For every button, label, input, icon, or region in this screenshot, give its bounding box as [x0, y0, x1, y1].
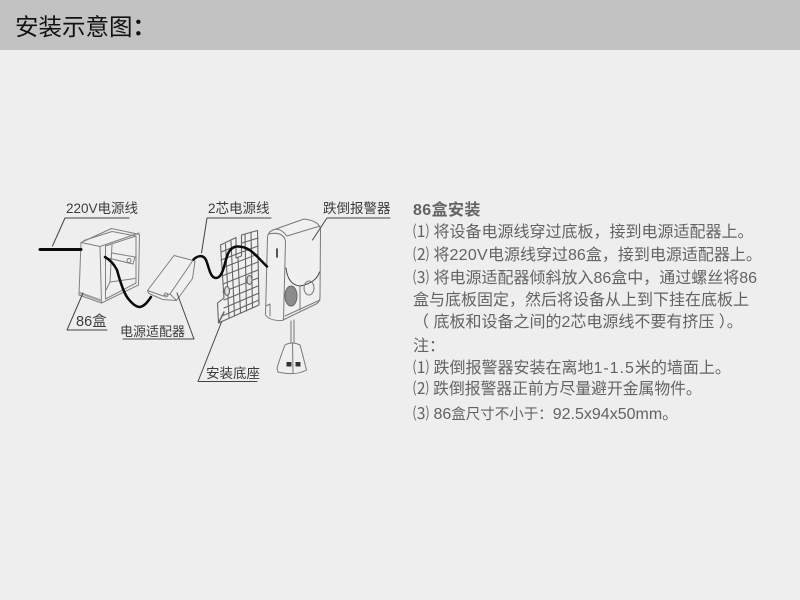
- step 3: ⑶ 将电源适配器倾斜放入86盒中，通过螺丝将86: [413, 270, 757, 287]
- step 3 end: （ 底板和设备之间的2芯电源线不要有挤压 ）。: [413, 314, 743, 331]
- pendant button: [277, 320, 306, 374]
- label: adapter: 电源适配器: [120, 324, 185, 339]
- label: 220V power line: 220V电源线: [66, 201, 138, 216]
- label: fall alarm: [312, 201, 391, 240]
- title bar: [0, 0, 800, 50]
- wall plate: [218, 230, 259, 323]
- instructions text block: [413, 201, 762, 423]
- label: mounting base: 安装底座: [206, 366, 260, 381]
- adapter: [148, 256, 195, 300]
- note 3: ⑶ 86盒尺寸不小于：92.5x94x50mm。: [413, 406, 678, 423]
- label: fall alarm: 跌倒报警器: [323, 201, 391, 216]
- label: 220V power line: [52, 201, 138, 246]
- alarm device: [266, 219, 320, 321]
- label: adapter: [120, 293, 194, 339]
- note heading: 注：: [413, 338, 445, 355]
- label: mounting base: [198, 322, 260, 382]
- note 1: ⑴ 跌倒报警器安装在离地1-1.5米的墙面上。: [413, 360, 731, 377]
- note 2: ⑵ 跌倒报警器正前方尽量避开金属物件。: [413, 381, 702, 398]
- label: 86 box: 86盒: [76, 313, 107, 330]
- black power wires: [40, 246, 267, 307]
- label: 2-core power line: [202, 201, 271, 253]
- step 1: ⑴ 将设备电源线穿过底板，接到电源适配器上。: [413, 224, 753, 241]
- label: 86 box: [67, 293, 107, 330]
- step 2: ⑵ 将220V电源线穿过86盒，接到电源适配器上。: [413, 247, 762, 264]
- 86 box: [79, 228, 140, 303]
- step 3 continued: 盒与底板固定，然后将设备从上到下挂在底板上: [413, 292, 749, 309]
- label: 2-core power line: 2芯电源线: [208, 201, 270, 216]
- title: 安装示意图：: [15, 14, 156, 40]
- heading: 86 box installation: 86盒安装: [413, 202, 481, 219]
